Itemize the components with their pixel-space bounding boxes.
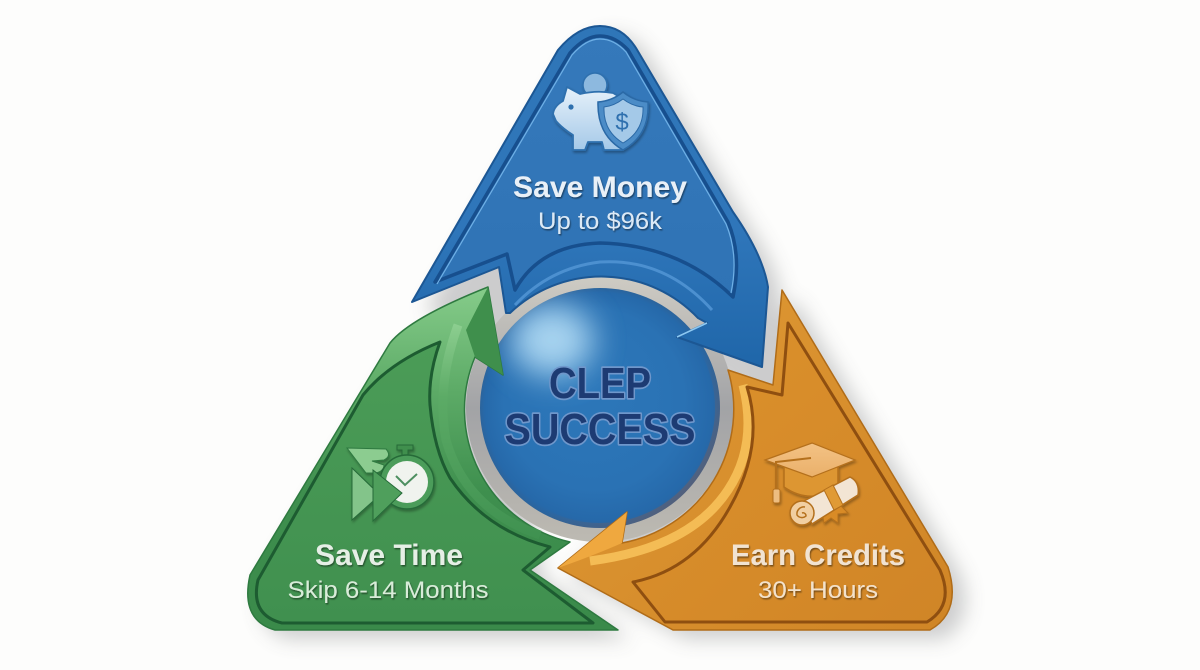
dollar sign: $ xyxy=(615,109,629,136)
diploma spiral xyxy=(790,501,814,525)
spiral centre xyxy=(797,507,806,518)
stopwatch hands xyxy=(396,474,417,485)
stopwatch face xyxy=(386,461,428,503)
drop shadow xyxy=(261,35,965,639)
shield xyxy=(598,92,648,150)
orange arrowhead facet xyxy=(558,512,627,568)
green inner panel xyxy=(256,342,593,623)
icon: graduation cap and diploma xyxy=(765,443,858,525)
subheading: skip 6-14 months: Skip 6-14 Months xyxy=(288,577,488,604)
second play triangle xyxy=(373,470,402,521)
blue arrow barb highlight xyxy=(677,323,707,337)
blue band highlight xyxy=(515,262,712,310)
stopwatch case xyxy=(380,455,434,509)
icon: stopwatch with fast forward xyxy=(347,445,434,521)
cap base xyxy=(784,466,838,496)
panel: earn credits xyxy=(558,290,952,630)
green arrow body xyxy=(248,287,618,630)
subheading: 30+ hours: 30+ Hours xyxy=(758,577,878,604)
orange arrow body xyxy=(558,290,952,630)
clep text: CLEP xyxy=(549,359,651,408)
orange inner panel xyxy=(633,323,945,622)
orange arc highlight xyxy=(590,385,748,561)
success text: SUCCESS xyxy=(504,405,696,454)
diploma band xyxy=(824,485,843,510)
highlight glow xyxy=(510,304,594,376)
wing xyxy=(347,448,389,473)
green arc highlight xyxy=(443,325,540,535)
sphere body xyxy=(480,288,720,528)
blue panel rim light xyxy=(437,39,734,293)
coin xyxy=(583,73,607,97)
heading: earn credits: Earn Credits xyxy=(731,539,905,572)
piggy xyxy=(553,87,634,150)
first play triangle xyxy=(352,468,380,520)
blue arrow body xyxy=(412,26,768,367)
subheading: up to $96k: Up to $96k xyxy=(538,208,663,235)
cap board xyxy=(765,443,855,477)
icon: piggy bank and shield xyxy=(553,73,648,150)
tassel xyxy=(776,458,811,490)
panel: save money xyxy=(412,26,768,367)
stopwatch crown xyxy=(397,445,413,456)
ribbon tails xyxy=(822,503,848,523)
panel: save time xyxy=(248,287,618,630)
sphere recess ring xyxy=(466,274,734,542)
piggy eye xyxy=(568,104,574,110)
sphere warm edge xyxy=(482,290,718,526)
clep outline: CLEP xyxy=(549,359,651,408)
success outline: SUCCESS xyxy=(504,405,696,454)
inner shield xyxy=(604,99,643,143)
green arrowhead facet xyxy=(466,287,503,375)
tassel end xyxy=(773,489,780,503)
heading: save time: Save Time xyxy=(315,539,463,572)
diploma xyxy=(802,477,858,524)
blue inner panel xyxy=(435,36,737,297)
central sphere xyxy=(480,288,720,528)
sphere highlight xyxy=(510,304,594,376)
heading: save money: Save Money xyxy=(513,171,687,204)
